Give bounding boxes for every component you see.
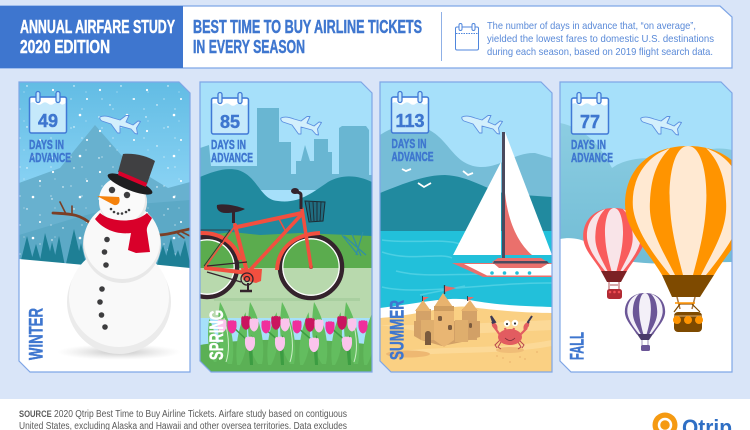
edition banner [0,6,183,68]
snowy ground [19,259,190,372]
description: during each season, based on 2019 flight search data. [487,46,713,58]
description: yielded the lowest fares to domestic U.S. destinations [487,33,714,45]
sandcastle [414,285,480,347]
sailboat [452,132,552,277]
label: days in advance: DAYS IN [571,137,606,152]
icon: calendar [456,24,478,50]
edition banner: 2020 EDITION [20,37,110,57]
label: days in advance: ADVANCE [392,149,434,164]
label: days in advance [392,136,434,164]
label: days in advance [571,137,613,165]
edition banner: ANNUAL AIRFARE STUDY [20,17,175,37]
label: days in advance [211,140,253,162]
city skyline [200,108,372,190]
icon: plane [100,116,140,134]
icon: plane [462,116,502,134]
frame [206,209,311,273]
calendar: 85 days: 85 [220,112,240,132]
hills [200,169,372,240]
birds [402,169,473,187]
footer [0,399,750,430]
sea [380,231,552,316]
label: days in advance: ADVANCE [29,150,71,165]
mountains [19,125,190,270]
grass [200,232,372,270]
label: days in advance: ADVANCE [571,150,613,165]
icon: plane [641,116,682,135]
title: BEST TIME TO BUY AIRLINE TICKETS [193,17,422,37]
balloon: purple [625,293,665,351]
label: summer: SUMMER [388,300,408,360]
path [200,268,372,318]
balloon: orange [625,146,750,332]
scarf [95,213,152,253]
calendar: 49 days [30,92,66,133]
panel: summer [380,82,552,372]
panel: winter [19,82,191,372]
description [487,20,714,58]
label: days in advance [29,140,71,162]
logo: Qtrip [652,412,732,430]
balloon: red [583,208,645,299]
saddle [217,204,245,213]
calendar: 113 days: 113 [395,111,425,131]
panel: fall [560,82,750,372]
leaves [208,302,374,365]
mudguards [200,233,320,270]
tulips: magenta and pale [227,320,368,334]
calendar: 77 days: 77 [580,112,600,132]
panel: spring [199,81,373,373]
label: days in advance: DAYS IN [29,137,64,152]
beach [380,299,552,372]
calendar: 49 days: 49 [38,111,58,131]
title: IN EVERY SEASON [193,37,305,57]
pine trees [20,229,191,268]
arms [53,202,190,238]
tulip field [200,302,374,372]
label: fall: FALL [568,332,588,360]
handlebar [293,192,301,209]
hills [560,123,732,290]
source note [19,409,347,430]
buttons [97,237,110,330]
label: days in advance: DAYS IN [392,136,426,151]
wheels [177,236,342,298]
calendar: 85 days [212,92,248,134]
label: spring: SPRING [207,310,228,360]
shrub [342,232,366,256]
description: The number of days in advance that, “on average”, [487,20,696,32]
hills [380,129,552,231]
calendar: 77 days [572,92,608,134]
label: days in advance: ADVANCE [211,150,253,165]
label: days in advance: DAYS IN [211,137,246,152]
face [109,187,130,215]
white ground [560,238,732,372]
top hat [108,154,155,195]
crab [491,316,532,353]
snowman [53,154,190,360]
calendar: 113 days [392,92,428,133]
header bar [0,6,732,68]
source note: SOURCE 2020 Qtrip Best Time to Buy Airline Tickets. Airfare study based on contiguous [19,409,347,420]
title [193,17,422,57]
bicycle [200,188,344,300]
icon: plane [281,116,322,135]
basket [305,201,325,222]
label: winter: WINTER [26,308,48,360]
drivetrain [200,230,253,291]
sand marks [496,351,538,363]
